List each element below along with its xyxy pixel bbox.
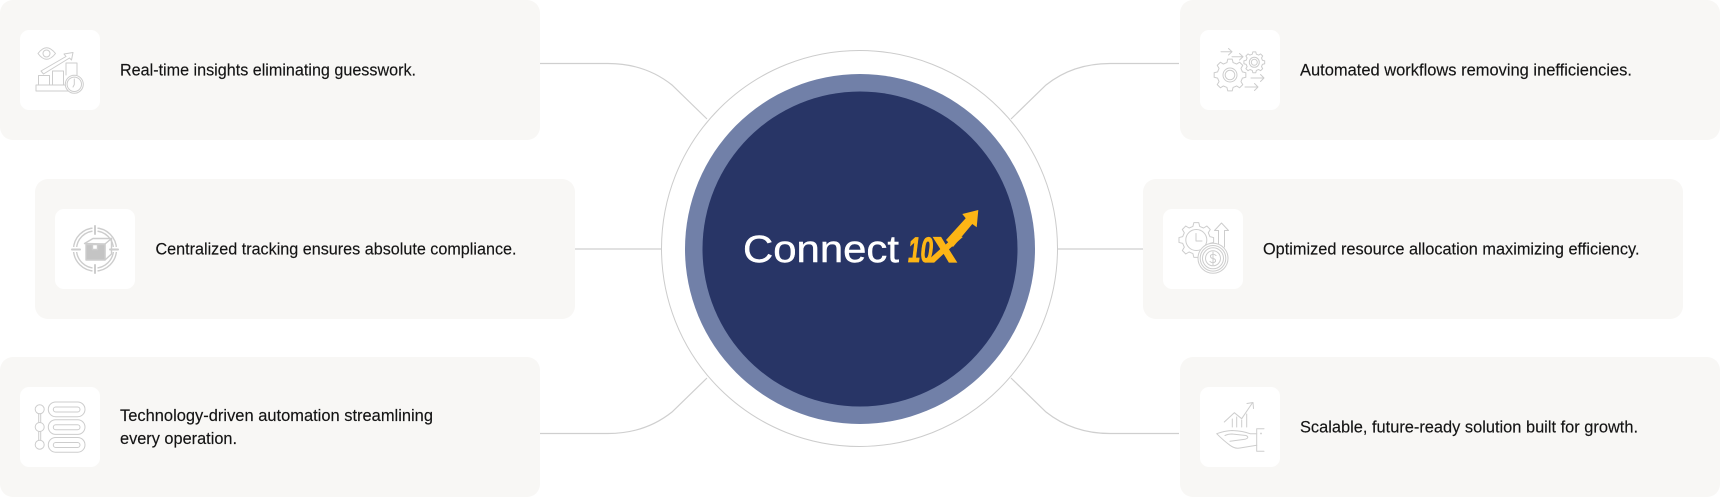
text: centralized tracking: Centralized tracking ensures absolute compliance. [156,240,516,258]
icon: rising arrow [946,210,978,247]
panel: optimized resource allocation [1143,179,1683,319]
panel: centralized tracking [35,179,575,319]
logo: Connect 10X: X [926,231,962,270]
text: real-time insights: Real-time insights eliminating guesswork. [120,60,416,80]
logo: Connect 10X: 10 [908,231,933,270]
icon: hand holding growth chart [1217,402,1264,451]
icon: gears and arrows [1214,48,1265,91]
text: technology-driven automation: Technology-driven automation streamlining [120,406,433,425]
icon: gear clock and coin [1179,223,1228,273]
icon: linked steps list [35,402,85,452]
text: technology-driven automation: every operation. [120,429,237,448]
panel: automated workflows [1180,0,1720,140]
panel: real-time insights [0,0,540,140]
connector lines [540,64,1179,434]
text: optimized resource allocation: Optimized resource allocation maximizing efficiency. [1263,240,1640,258]
logo: Connect 10X: Connect [743,229,899,271]
logo: Connect 10X [743,210,978,271]
text: scalable solution: Scalable, future-ready solution built for growth. [1300,418,1638,436]
panel: scalable solution [1180,357,1720,497]
icon: eye, bar chart and clock [36,48,83,93]
text: automated workflows: Automated workflows removing inefficiencies. [1300,60,1632,80]
panel: technology-driven automation [0,357,540,497]
icon: box in target [71,225,119,274]
central hub [662,50,1058,446]
